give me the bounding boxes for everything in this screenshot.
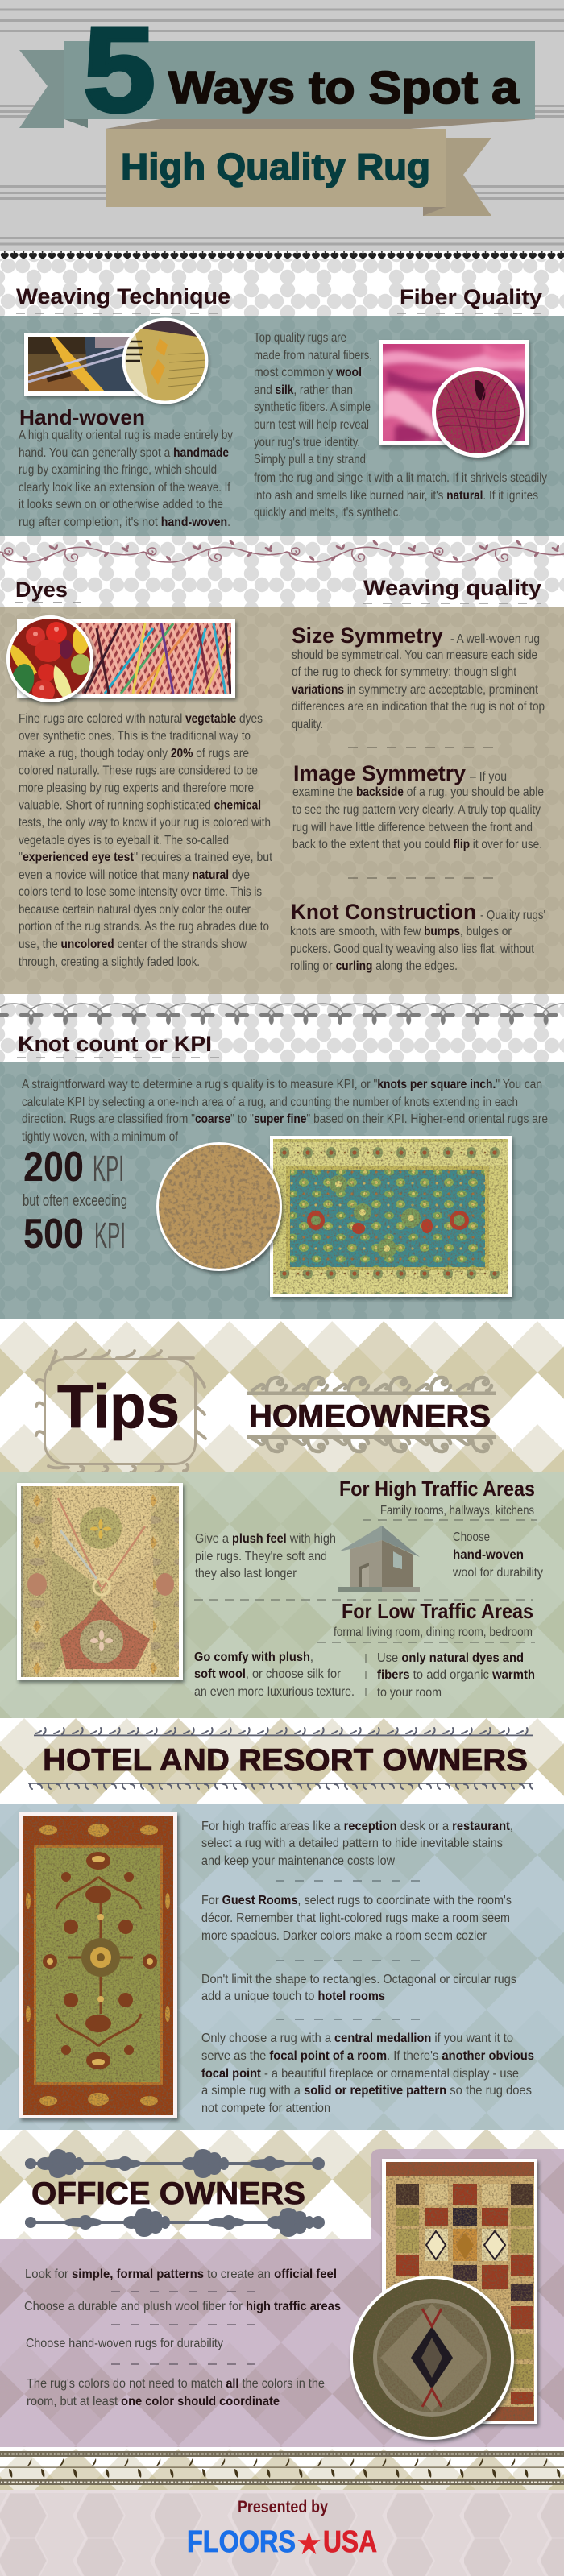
photo: dyes	[6, 615, 235, 702]
text: fiber quality	[254, 331, 547, 520]
text: choose hand-woven: wool for durability	[452, 1566, 543, 1580]
text: size symmetry: variations in symmetry are acceptable, prominent	[292, 683, 538, 697]
text: plush feel	[195, 1532, 336, 1580]
panel: homeowners	[0, 1472, 564, 1718]
text: dyes: tests, the only way to know if your rug is colored with	[19, 816, 271, 830]
text: knot construction	[290, 900, 545, 973]
spade border	[0, 251, 564, 260]
text: choose hand-woven	[452, 1530, 543, 1580]
text: dyes: make a rug, though today only 20% of rugs are	[19, 747, 249, 760]
text: guest rooms	[201, 1894, 512, 1943]
heading: dyes: Dyes	[15, 578, 68, 602]
text: presented by: Presented by	[238, 2498, 328, 2516]
photo: rug with close-up	[156, 1136, 512, 1297]
bottom border	[0, 2447, 564, 2490]
text: knot construction: Knot Construction	[291, 900, 476, 924]
text: knot construction: rolling or curling along the edges.	[290, 959, 458, 973]
text: dyes: portion of the rug strands. As the rug abrades due to	[19, 920, 269, 934]
text: image symmetry	[292, 761, 544, 851]
text: image symmetry: – If you	[470, 770, 507, 784]
text: fiber quality: burn test will help reveal	[254, 418, 369, 432]
heading: high traffic: For High Traffic Areas	[339, 1476, 535, 1501]
text: hand-woven: hand. You can generally spot a handmade	[19, 446, 229, 460]
text: medallion: a simple rug with a solid or repetitive pattern so the rug does	[201, 2084, 532, 2098]
text: dyes: valuable. Short of running sophisticated chemical	[19, 799, 261, 812]
text: size symmetry: quality.	[292, 718, 323, 731]
text: simple patterns: Look for simple, formal patterns to create an official feel	[25, 2267, 337, 2281]
text: hand-woven: A high quality oriental rug is made entirely by	[19, 429, 233, 442]
heading: homeowners: HOMEOWNERS	[249, 1399, 491, 1434]
heading text: OFFICE OWNERS	[31, 2176, 305, 2211]
text: hand-woven: rug by examining the fringe, which should	[19, 463, 217, 477]
text: high traffic hotels: select a rug with a detailed pattern to hide inevitable stains	[201, 1837, 503, 1850]
vine border	[0, 532, 564, 565]
logo: floors usa: FLOORS	[187, 2525, 296, 2559]
text: fiber quality: Top quality rugs are	[254, 331, 346, 345]
text: medallion: Only choose a rug with a central medallion if you want it to	[201, 2031, 513, 2045]
text: size symmetry: of the rug to check for symmetry; though slight	[292, 665, 516, 679]
text: but often exceeding: but often exceeding	[23, 1192, 127, 1210]
text: durable wool: Choose a durable and plush wool fiber for high traffic areas	[24, 2300, 341, 2313]
text: go comfy: soft wool, or choose silk for	[194, 1667, 342, 1681]
title number: 5	[83, 2, 156, 137]
tips frame and heading	[36, 1350, 205, 1472]
text: high traffic hotels: and keep your maintenance costs low	[201, 1854, 395, 1868]
ribbon: top	[19, 41, 535, 129]
heading: office owners	[25, 2149, 325, 2237]
panel: office owners	[0, 2149, 564, 2447]
text: hand-woven	[19, 429, 233, 529]
text: natural dyes: Use only natural dyes and	[377, 1651, 524, 1665]
hotel section background	[0, 1718, 564, 1804]
text: hand-woven: rug after completion, it's not hand-woven.	[19, 516, 230, 529]
text: natural dyes: to your room	[377, 1686, 442, 1700]
icon: house	[338, 1526, 420, 1592]
text: medallion: serve as the focal point of a room. If there's another obvious	[201, 2049, 534, 2063]
text: dyes: over synthetic ones. This is the traditional way to	[19, 730, 251, 743]
text: hand-woven: clearly look like an extension of the weave. If	[19, 481, 230, 495]
ornament: bottom	[25, 2208, 325, 2237]
text: medallion: focal point - a beautiful fireplace or ornamental display - use	[201, 2067, 519, 2081]
text: size symmetry: Size Symmetry	[292, 623, 443, 648]
logo: floors usa: USA	[323, 2525, 377, 2559]
title line 2: High Quality Rug	[121, 146, 430, 188]
text: fiber quality: Simply pull a tiny strand	[254, 453, 366, 466]
heading: hotel and resort owners: HOTEL AND RESORT OWNERS	[43, 1743, 528, 1778]
text: dyes: "experienced eye test" requires a trained eye, but	[19, 851, 272, 864]
text: medallion	[201, 2031, 534, 2115]
text: colors	[27, 2377, 325, 2408]
text: go comfy: Go comfy with plush,	[194, 1650, 313, 1664]
text: fiber quality: synthetic fibers. A simple	[254, 400, 371, 414]
text: choose hand-woven: Choose	[453, 1530, 490, 1544]
text: fiber quality: most commonly wool	[254, 366, 362, 379]
panel: hotel and resort	[0, 1804, 564, 2130]
text: go comfy: an even more luxurious texture.	[194, 1685, 355, 1699]
heading: weaving technique: Weaving Technique	[16, 284, 230, 309]
text: natural dyes: fibers to add organic warmth	[377, 1668, 535, 1682]
scallop border	[0, 999, 564, 1028]
photo: loom	[24, 318, 209, 407]
text: dyes: through, creating a slightly faded look.	[19, 955, 200, 969]
footer	[0, 2490, 564, 2576]
text: size symmetry: - A well-woven rug	[450, 632, 540, 646]
heading: tips: Tips	[57, 1373, 180, 1441]
text: fiber quality: and silk, rather than	[254, 383, 353, 397]
text: knot construction: - Quality rugs'	[480, 909, 545, 922]
photo: silk and yarn	[379, 340, 532, 458]
text: guest rooms: décor. Remember that light-colored rugs make a room seem	[201, 1911, 510, 1925]
text: image symmetry: back to the extent that you could flip it over for use.	[292, 838, 542, 851]
text: dyes: colors tend to lose some intensity over time. This is	[19, 885, 262, 899]
panel: knot count	[0, 1062, 564, 1319]
text: fiber quality: made from natural fibers,	[254, 349, 372, 362]
title line 1: Ways to Spot a	[168, 62, 520, 114]
text: image symmetry: examine the backside of a rug, you should be able	[292, 785, 544, 799]
text: high traffic hotels: For high traffic areas like a reception desk or a restaurant,	[201, 1820, 513, 1833]
stat: 500 kpi: 500	[23, 1211, 84, 1257]
text: dyes: even a novice will notice that many natural dye	[19, 868, 250, 882]
text: high traffic hotels	[201, 1820, 513, 1868]
office section background	[0, 2130, 564, 2239]
stat: 500 kpi	[23, 1211, 126, 1257]
text: fiber quality: your rug's true identity.	[254, 436, 360, 449]
text: fiber quality: into ash and smells like burned hair, it's natural. If it ignites	[254, 489, 538, 503]
text: dyes: Fine rugs are colored with natural vegetable dyes	[19, 712, 263, 726]
heading: knot count: Knot count or KPI	[18, 1032, 212, 1056]
text: plush feel: pile rugs. They're soft and	[195, 1550, 327, 1563]
text: go comfy	[194, 1650, 355, 1699]
text: dyes: more pleasing by rug experts and therefore more	[19, 781, 254, 795]
text: shapes: Don't limit the shape to rectangles. Octagonal or circular rugs	[201, 1973, 516, 1986]
text: natural dyes	[377, 1651, 535, 1700]
text: plush feel: they also last longer	[195, 1567, 297, 1580]
text: dyes	[19, 712, 272, 969]
photo: office rugs	[350, 2159, 537, 2440]
text: dyes: vegetable dyes is to eyeball it. The so-called	[19, 834, 229, 847]
text: shapes: add a unique touch to hotel rooms	[201, 1990, 385, 2003]
tips section background	[0, 1321, 564, 1472]
text: guest rooms: more spacious. Darker colors make a room seem cozier	[201, 1929, 487, 1943]
subheading: hand-woven: Hand-woven	[19, 405, 145, 429]
photo: hotel rug	[19, 1812, 177, 2118]
header banner	[0, 0, 564, 251]
text: shapes	[201, 1973, 516, 2003]
text: dyes: because certain natural dyes only color the outer	[19, 903, 251, 917]
stat: 200 kpi: KPI	[93, 1148, 124, 1189]
panel: dyes and weaving quality	[0, 607, 564, 994]
logo: floors usa	[187, 2525, 377, 2562]
ornament: top	[25, 2149, 325, 2178]
text: dyes: use, the uncolored center of the strands show	[19, 938, 247, 951]
panel: weaving and fiber	[0, 316, 564, 536]
logo: floors usa: ★	[296, 2526, 322, 2562]
text: medallion: not compete for attention	[201, 2102, 330, 2115]
text: kpi intro: A straightforward way to determine a rug's quality is to measure KPI, or "knots per square inch." You can	[22, 1078, 542, 1091]
dotted page background	[0, 251, 564, 1319]
stat: 200 kpi: 200	[23, 1144, 84, 1191]
stat: 500 kpi: KPI	[94, 1215, 126, 1256]
text: size symmetry	[292, 623, 545, 731]
text: colors: room, but at least one color should coordinate	[27, 2395, 280, 2408]
text: colors: The rug's colors do not need to match all the colors in the	[27, 2377, 325, 2391]
text: dyes: colored naturally. These rugs are considered to be	[19, 764, 258, 778]
text: kpi intro	[22, 1078, 548, 1144]
text: fiber quality: quickly and melts, it's synthetic.	[254, 506, 401, 520]
heading: fiber quality: Fiber Quality	[400, 285, 542, 309]
text: kpi intro: tightly woven, with a minimum of	[22, 1130, 178, 1144]
text: hand-woven durability: Choose hand-woven rugs for durability	[26, 2337, 223, 2350]
text: knot construction: knots are smooth, with few bumps, bulges or	[290, 925, 512, 938]
heading: hotel and resort owners	[28, 1726, 533, 1791]
text: low traffic rooms: formal living room, dining room, bedroom	[334, 1626, 533, 1639]
photo: homeowner rug	[17, 1483, 183, 1680]
heading: homeowners	[247, 1375, 496, 1456]
text: guest rooms: For Guest Rooms, select rugs to coordinate with the room's	[201, 1894, 512, 1907]
text: high traffic rooms: Family rooms, hallways, kitchens	[380, 1504, 534, 1518]
text: image symmetry: Image Symmetry	[293, 761, 466, 785]
heading: low traffic: For Low Traffic Areas	[342, 1599, 533, 1623]
text: choose hand-woven: hand-woven	[453, 1548, 524, 1562]
text: hand-woven: it looks sewn on or otherwise added to the	[19, 498, 223, 511]
stat: 200 kpi	[23, 1144, 124, 1191]
text: plush feel: Give a plush feel with high	[195, 1532, 336, 1546]
ribbon: bottom	[106, 129, 491, 216]
heading: weaving quality: Weaving quality	[363, 576, 541, 600]
